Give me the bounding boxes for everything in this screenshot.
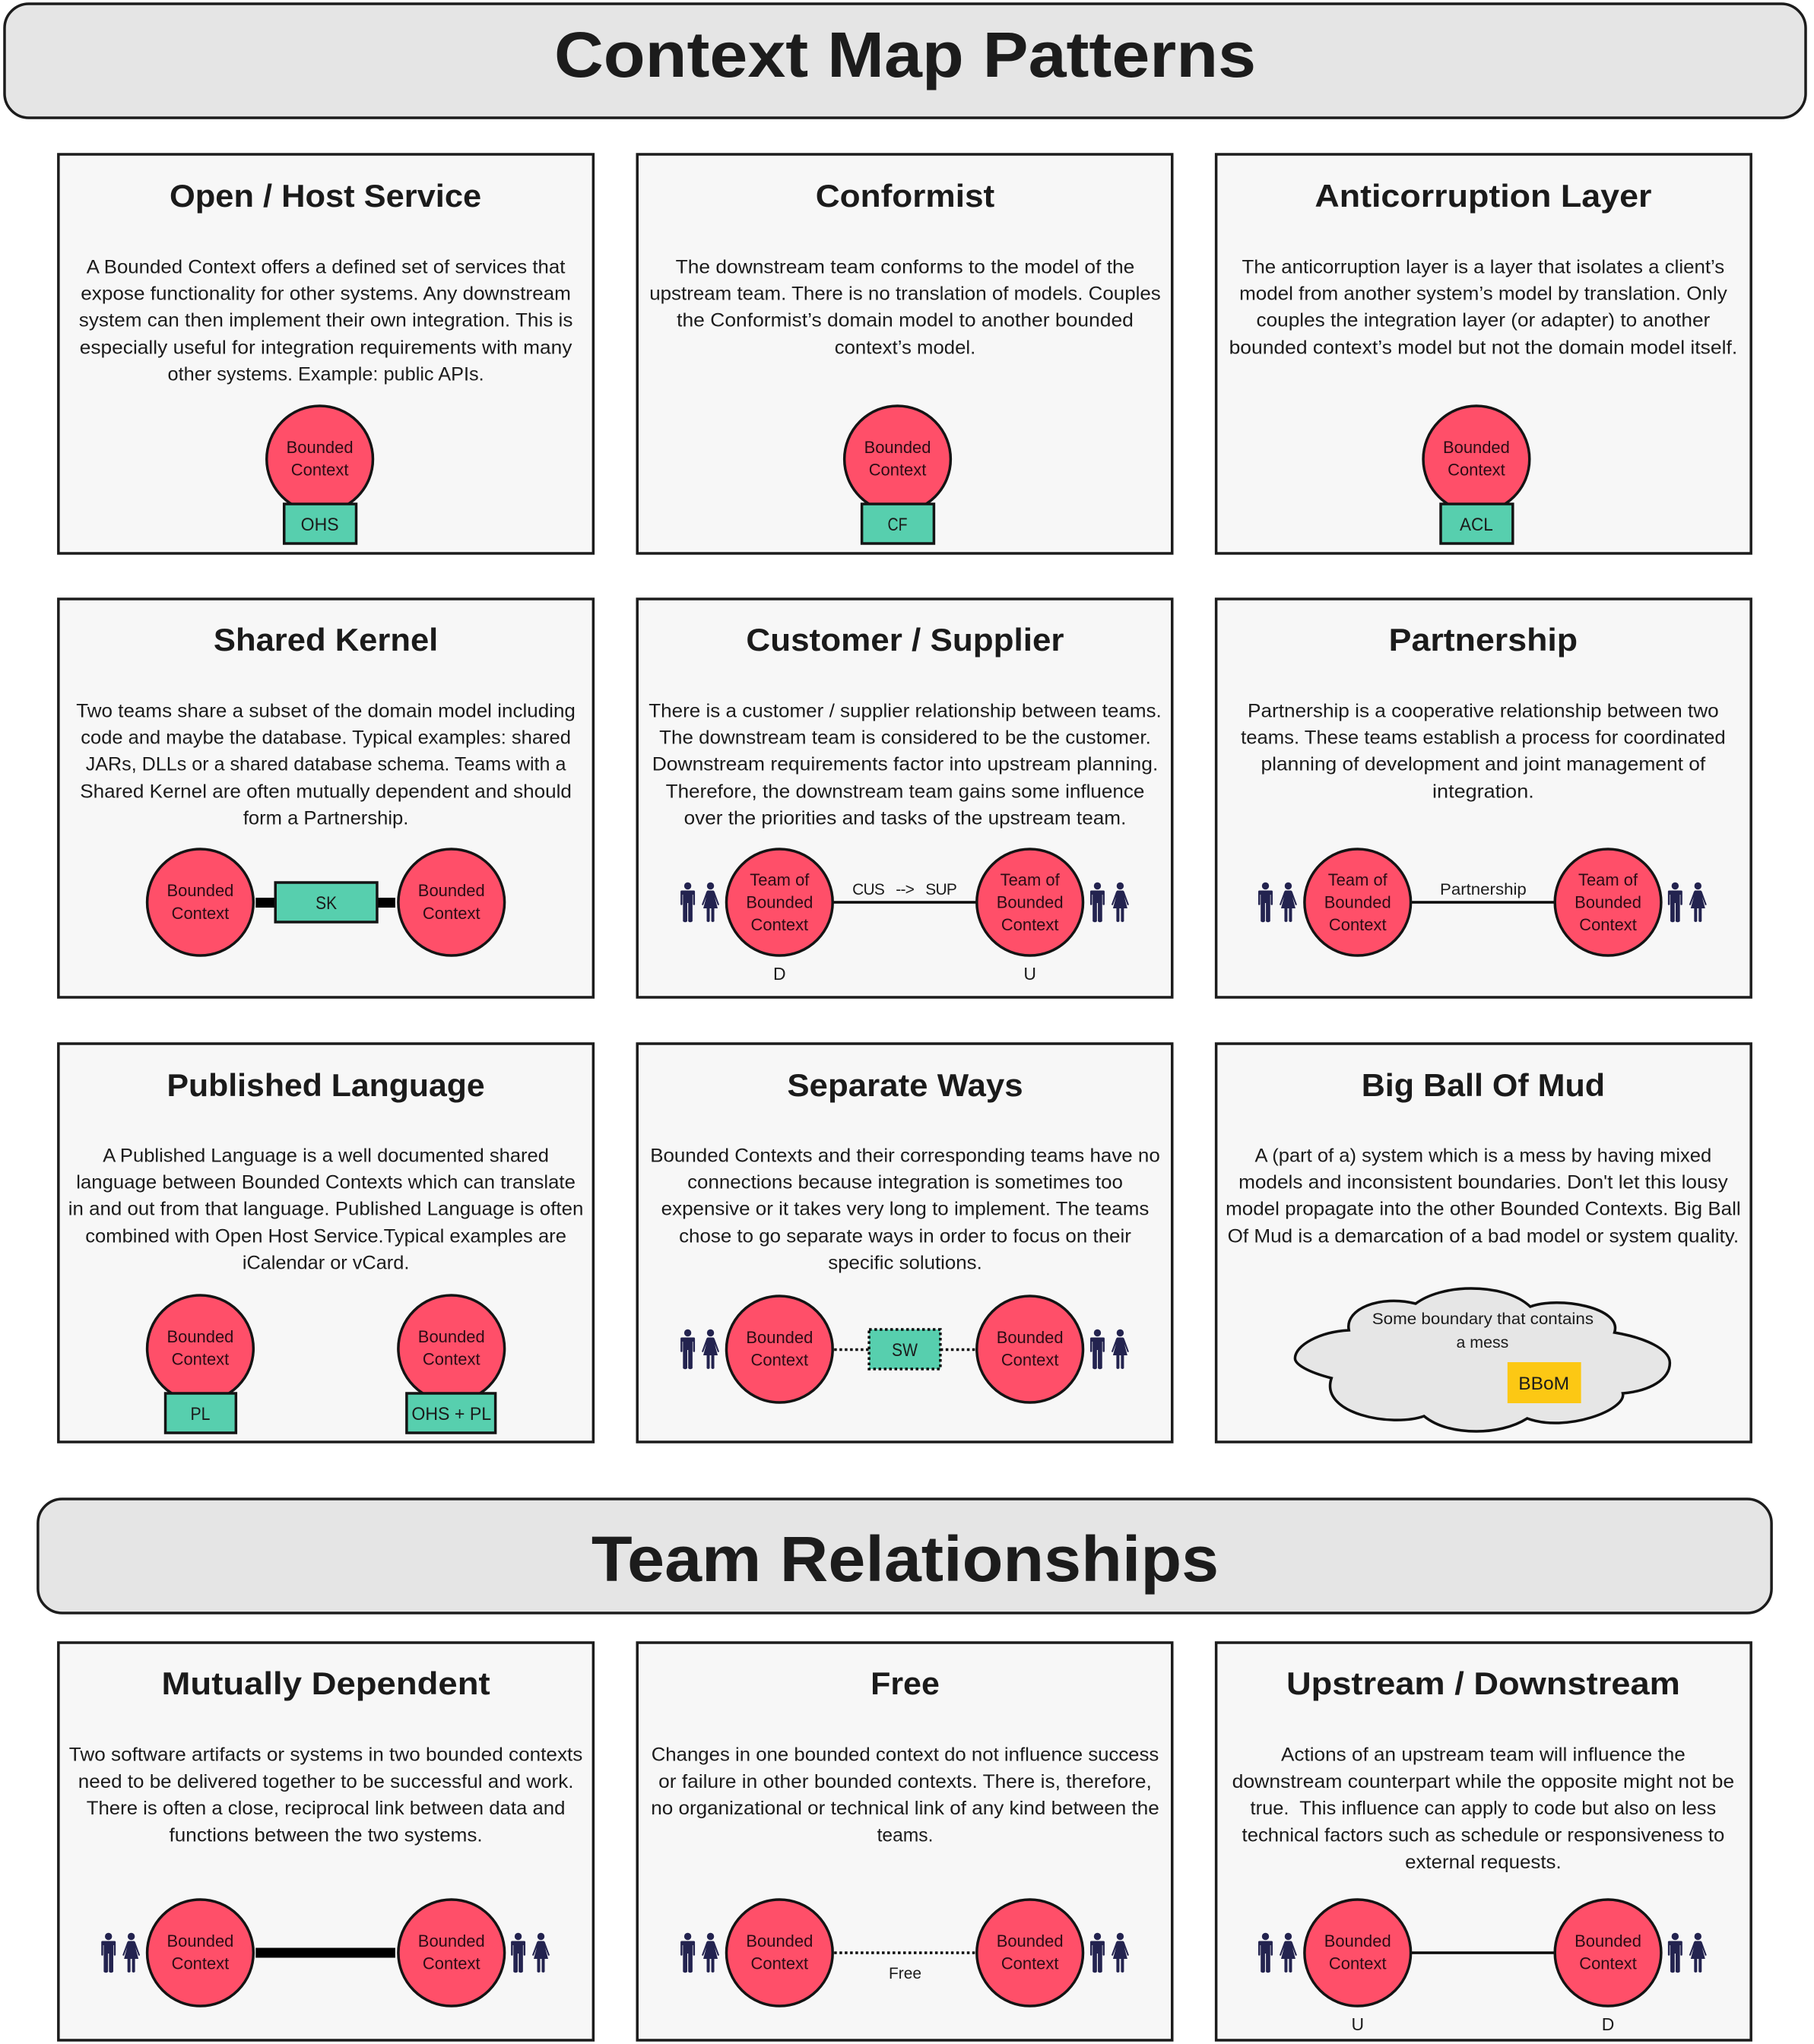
description: no organizational or technical link of any kind between the	[651, 1798, 1159, 1819]
panel: Upstream / Downstream	[1216, 1643, 1751, 2040]
diagram: cloud boundary with BBoM: a mess	[1456, 1334, 1508, 1352]
diagram: shared kernel between two contexts: Context	[172, 904, 229, 923]
panel title: Open / Host Service	[170, 178, 481, 214]
diagram: mutually dependent teams	[101, 1900, 550, 2006]
diagram: customer supplier teams: Team of	[1001, 870, 1061, 889]
diagram: separate ways: Context	[751, 1350, 808, 1370]
diagram: bounded context with CF	[845, 406, 950, 543]
description: code and maybe the database. Typical examples: shared	[81, 727, 571, 749]
description	[1241, 700, 1726, 803]
panel: Big Ball Of Mud	[1216, 1044, 1751, 1442]
diagram: shared kernel between two contexts: Bounded	[418, 881, 485, 900]
description: teams.	[877, 1824, 933, 1846]
description: over the priorities and tasks of the upstream team.	[684, 807, 1126, 829]
description	[649, 700, 1162, 829]
panel: Shared Kernel	[59, 599, 593, 997]
panel title: Published Language	[167, 1067, 485, 1103]
description: Downstream requirements factor into upstream planning.	[652, 753, 1158, 775]
description: upstream team. There is no translation of models. Couples	[649, 283, 1161, 305]
description: Actions of an upstream team will influence the	[1281, 1744, 1686, 1766]
panel: Open / Host Service	[59, 154, 593, 553]
description: Of Mud is a demarcation of a bad model or system quality.	[1228, 1225, 1739, 1247]
panel title: Partnership	[1389, 622, 1578, 658]
description: Shared Kernel are often mutually dependent and should	[80, 781, 572, 803]
description: or failure in other bounded contexts. There is, therefore,	[658, 1771, 1152, 1792]
diagram: customer supplier teams: Context	[751, 915, 808, 934]
description: teams. These teams establish a process for coordinated	[1241, 727, 1726, 749]
diagram: free teams	[680, 1900, 1129, 2006]
diagram: free teams: Bounded	[997, 1932, 1064, 1951]
description: iCalendar or vCard.	[243, 1252, 409, 1274]
heading: Context Map Patterns	[5, 4, 1806, 118]
description: model from another system’s model by translation. Only	[1239, 283, 1727, 305]
description: functions between the two systems.	[170, 1824, 483, 1846]
panel title: Shared Kernel	[214, 622, 438, 658]
description	[1232, 1744, 1734, 1873]
description: models and inconsistent boundaries. Don't let this lousy	[1238, 1171, 1728, 1193]
panel title: Anticorruption Layer	[1315, 178, 1651, 214]
diagram: separate ways	[680, 1296, 1129, 1402]
diagram: partnership teams: Partnership	[1440, 881, 1527, 898]
description: system can then implement their own integration. This is	[79, 309, 572, 331]
description: technical factors such as schedule or responsiveness to	[1242, 1824, 1724, 1846]
description: form a Partnership.	[243, 807, 408, 829]
diagram: partnership teams: Bounded	[1324, 892, 1391, 912]
diagram: published language contexts: Bounded	[167, 1327, 233, 1346]
diagram: shared kernel between two contexts: Context	[423, 904, 480, 923]
diagram: upstream downstream teams: Bounded	[1324, 1932, 1391, 1951]
description: specific solutions.	[828, 1252, 982, 1274]
panel title: Free	[871, 1665, 940, 1701]
description: Partnership is a cooperative relationship between two	[1248, 700, 1719, 722]
description: The downstream team is considered to be the customer.	[659, 727, 1151, 749]
diagram: free teams: Context	[1001, 1954, 1058, 1973]
diagram: customer supplier teams: Bounded	[746, 892, 813, 912]
diagram: upstream downstream teams: Context	[1329, 1954, 1387, 1973]
description: language between Bounded Contexts which can translate	[76, 1171, 576, 1193]
description: A (part of a) system which is a mess by having mixed	[1255, 1145, 1711, 1167]
diagram: cloud boundary with BBoM	[1295, 1288, 1670, 1431]
description: Two software artifacts or systems in two bounded contexts	[69, 1744, 582, 1766]
diagram: separate ways: SW	[892, 1340, 918, 1361]
diagram: bounded context with OHS: Bounded	[287, 438, 354, 457]
diagram: upstream downstream teams: U	[1351, 2014, 1364, 2034]
diagram: customer supplier teams: U	[1023, 964, 1036, 984]
diagram: free teams: Free	[889, 1965, 921, 1982]
description: bounded context’s model but not the domain model itself.	[1229, 337, 1737, 359]
description	[1229, 256, 1737, 359]
description: combined with Open Host Service.Typical examples are	[85, 1225, 566, 1247]
description: The anticorruption layer is a layer that isolates a client’s	[1242, 256, 1724, 278]
description: model propagate into the other Bounded Contexts. Big Ball	[1226, 1198, 1741, 1220]
description: chose to go separate ways in order to focus on their	[679, 1225, 1131, 1247]
description: in and out from that language. Published Language is often	[68, 1198, 583, 1220]
diagram: published language contexts: Context	[172, 1349, 229, 1369]
diagram: partnership teams	[1258, 849, 1707, 955]
diagram: bounded context with CF: Context	[869, 460, 926, 480]
description	[79, 256, 572, 385]
description: connections because integration is sometimes too	[687, 1171, 1123, 1193]
description: Bounded Contexts and their corresponding teams have no	[650, 1145, 1160, 1167]
diagram: free teams: Bounded	[746, 1932, 813, 1951]
panel: Published Language	[59, 1044, 593, 1442]
diagram: shared kernel between two contexts: Bounded	[167, 881, 233, 900]
panel title: Conformist	[816, 178, 994, 214]
description: A Bounded Context offers a defined set of services that	[87, 256, 565, 278]
diagram: partnership teams: Bounded	[1575, 892, 1641, 912]
description: the Conformist’s domain model to another bounded	[677, 309, 1134, 331]
diagram: bounded context with OHS: Context	[291, 460, 348, 480]
diagram: bounded context with ACL: ACL	[1460, 515, 1493, 535]
diagram: separate ways: Context	[1001, 1350, 1058, 1370]
description: true. This influence can apply to code but also on less	[1251, 1798, 1716, 1819]
diagram: upstream downstream teams: Bounded	[1575, 1932, 1641, 1951]
description: Therefore, the downstream team gains some influence	[666, 781, 1144, 803]
diagram: upstream downstream teams	[1258, 1900, 1707, 2034]
diagram: bounded context with ACL	[1423, 406, 1530, 543]
description: other systems. Example: public APIs.	[168, 363, 484, 385]
description	[1226, 1145, 1741, 1247]
diagram: customer supplier teams	[680, 849, 1129, 984]
diagram: published language contexts: Bounded	[418, 1327, 485, 1346]
panel: Anticorruption Layer	[1216, 154, 1751, 553]
diagram: cloud boundary with BBoM: BBoM	[1518, 1374, 1569, 1394]
heading: Context Map Patterns: Context Map Patterns	[554, 19, 1256, 90]
description: context’s model.	[835, 337, 975, 359]
diagram: customer supplier teams: Context	[1001, 915, 1058, 934]
diagram: partnership teams: Team of	[1578, 870, 1638, 889]
diagram: published language contexts: OHS + PL	[411, 1404, 491, 1424]
panel title: Upstream / Downstream	[1286, 1665, 1680, 1701]
diagram: upstream downstream teams: D	[1602, 2014, 1614, 2034]
diagram: mutually dependent teams: Context	[423, 1954, 480, 1973]
description: Two teams share a subset of the domain model including	[76, 700, 576, 722]
diagram: cloud boundary with BBoM: Some boundary that contains	[1372, 1310, 1594, 1328]
heading: Team Relationships: Team Relationships	[591, 1523, 1219, 1595]
description: downstream counterpart while the opposite might not be	[1232, 1771, 1734, 1792]
description: The downstream team conforms to the model of the	[676, 256, 1134, 278]
diagram: free teams: Context	[751, 1954, 808, 1973]
diagram: bounded context with CF: Bounded	[864, 438, 931, 457]
description: couples the integration layer (or adapter) to another	[1257, 309, 1710, 331]
panel: Mutually Dependent	[59, 1643, 593, 2040]
diagram: customer supplier teams: Team of	[750, 870, 810, 889]
description	[69, 1744, 582, 1846]
diagram: bounded context with ACL: Bounded	[1443, 438, 1510, 457]
description	[649, 256, 1161, 359]
panel: Partnership	[1216, 599, 1751, 997]
diagram: shared kernel between two contexts: SK	[316, 893, 337, 914]
description: Changes in one bounded context do not influence success	[652, 1744, 1159, 1766]
panel: Conformist	[637, 154, 1172, 553]
diagram: upstream downstream teams: Context	[1579, 1954, 1637, 1973]
panel title: Customer / Supplier	[746, 622, 1064, 658]
diagram: customer supplier teams: D	[773, 964, 786, 984]
diagram: mutually dependent teams: Bounded	[167, 1932, 233, 1951]
panel title: Big Ball Of Mud	[1362, 1067, 1605, 1103]
diagram: published language contexts: PL	[190, 1404, 210, 1424]
panel title: Mutually Dependent	[162, 1665, 490, 1701]
diagram: partnership teams: Team of	[1328, 870, 1388, 889]
diagram: customer supplier teams: Bounded	[997, 892, 1064, 912]
description: expensive or it takes very long to implement. The teams	[661, 1198, 1149, 1220]
description	[76, 700, 576, 829]
diagram: published language contexts	[147, 1295, 505, 1433]
description: need to be delivered together to be successful and work.	[78, 1771, 573, 1792]
heading: Team Relationships	[38, 1499, 1771, 1613]
diagram: separate ways: Bounded	[746, 1328, 813, 1347]
diagram: mutually dependent teams: Context	[172, 1954, 229, 1973]
panel: Free	[637, 1643, 1172, 2040]
panel: Customer / Supplier	[637, 599, 1172, 997]
description: external requests.	[1405, 1852, 1562, 1873]
diagram: published language contexts: Context	[423, 1349, 480, 1369]
panel title: Separate Ways	[787, 1067, 1023, 1103]
diagram: bounded context with OHS: OHS	[301, 515, 339, 535]
diagram: separate ways: Bounded	[997, 1328, 1064, 1347]
diagram: bounded context with ACL: Context	[1448, 460, 1505, 480]
description: integration.	[1432, 781, 1534, 803]
description	[650, 1145, 1160, 1274]
description: JARs, DLLs or a shared database schema. Teams with a	[86, 753, 566, 775]
diagram: partnership teams: Context	[1579, 915, 1637, 934]
description	[651, 1744, 1159, 1846]
diagram: partnership teams: Context	[1329, 915, 1387, 934]
description: There is often a close, reciprocal link between data and	[87, 1798, 565, 1819]
diagram: mutually dependent teams: Bounded	[418, 1932, 485, 1951]
diagram: bounded context with CF: CF	[888, 515, 907, 535]
description: especially useful for integration requirements with many	[80, 337, 572, 359]
description: A Published Language is a well documented shared	[103, 1145, 549, 1167]
diagram: customer supplier teams: CUS --> SUP	[852, 881, 957, 898]
description	[68, 1145, 583, 1274]
description: expose functionality for other systems. Any downstream	[81, 283, 571, 305]
panel: Separate Ways	[637, 1044, 1172, 1442]
diagram: shared kernel between two contexts	[147, 849, 505, 955]
diagram: bounded context with OHS	[267, 406, 373, 543]
description: There is a customer / supplier relationship between teams.	[649, 700, 1162, 722]
description: planning of development and joint management of	[1261, 753, 1705, 775]
